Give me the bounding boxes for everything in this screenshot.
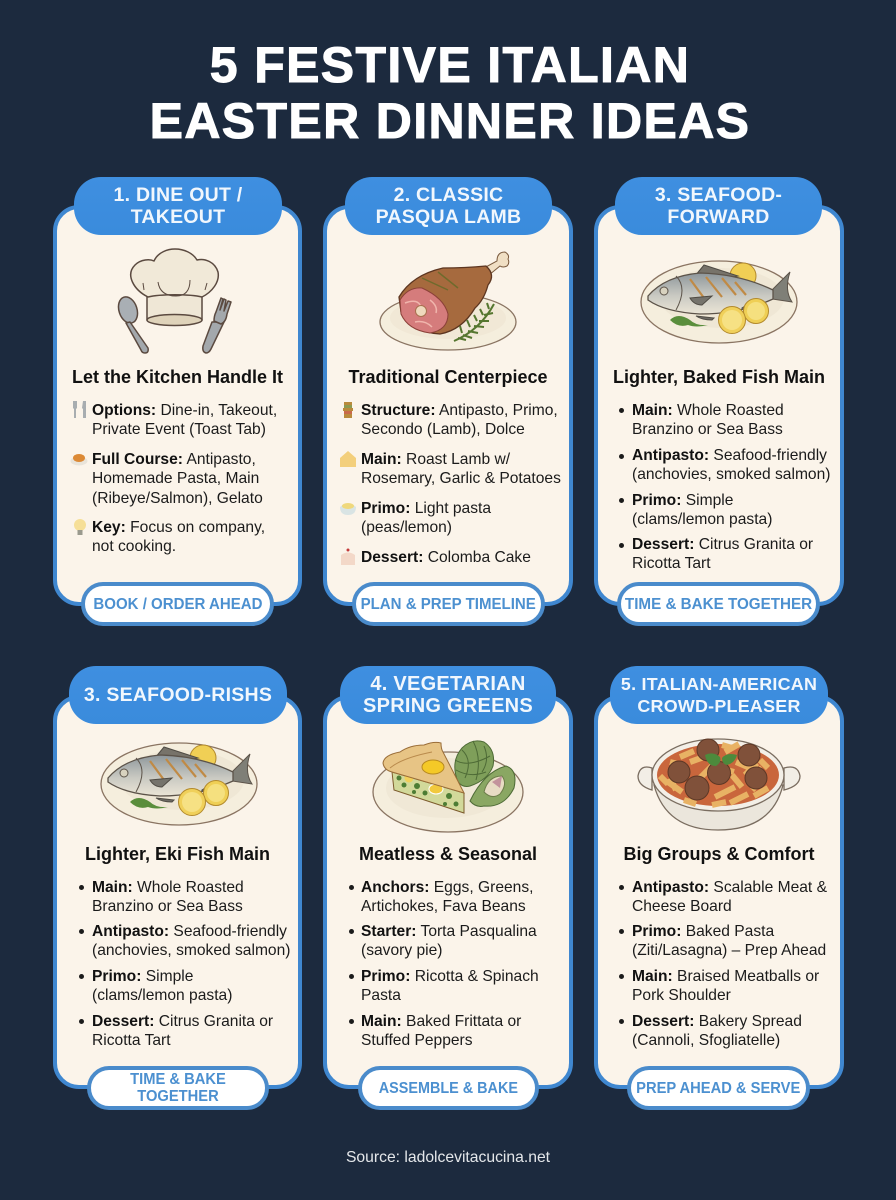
button: plan and prep: [352, 582, 545, 626]
button: assemble and bake: ASSEMBLE & BAKE: [379, 1080, 518, 1096]
button: prep ahead and serve: [627, 1066, 810, 1110]
list: seafood-rishs items: Primo: Simple: [92, 968, 193, 985]
text: full course: (Ribeye/Salmon), Gelato: [92, 490, 263, 507]
text: structure: [361, 402, 558, 438]
list: vegetarian items: Stuffed Peppers: [361, 1032, 473, 1049]
icon: torta pasqualina and artichokes: [372, 740, 524, 833]
list: seafood-forward items: Branzino or Sea Bass: [632, 421, 783, 438]
list: vegetarian items: Primo: Ricotta & Spinach: [361, 968, 539, 985]
list: vegetarian items: Main: Baked Frittata or: [361, 1013, 521, 1030]
header: dine out: 1. DINE OUT /: [114, 184, 242, 206]
text: structure: Structure: Antipasto, Primo,: [361, 402, 558, 419]
text: main lamb: Rosemary, Garlic & Potatoes: [361, 470, 561, 487]
heading: lighter fish main garbled: Lighter, Eki Fish Main: [85, 844, 270, 864]
list: seafood-rishs items: Ricotta Tart: [92, 1032, 171, 1049]
header: seafood-rishs: [69, 666, 287, 724]
icon: baked ziti dish: [637, 738, 801, 831]
title: 5 FESTIVE ITALIAN: [210, 37, 690, 93]
list: vegetarian items: (savory pie): [361, 942, 442, 959]
list: seafood-forward items: Ricotta Tart: [632, 555, 711, 572]
header: italian-american: 5. ITALIAN-AMERICAN: [621, 674, 817, 694]
text: full course: [92, 451, 263, 507]
icon: baked fish on plate second: [100, 742, 258, 826]
list: seafood-forward items: Dessert: Citrus Granita or: [632, 536, 813, 553]
icon: cheese: [340, 451, 356, 467]
panel: 2 classic lamb: [323, 177, 573, 606]
list: vegetarian items: Artichokes, Fava Beans: [361, 898, 526, 915]
text: key: not cooking.: [92, 538, 176, 555]
button: time and bake: [617, 582, 820, 626]
text: structure: Secondo (Lamb), Dolce: [361, 421, 525, 438]
list: italian-american items: (Ziti/Lasagna) – Prep Ahead: [632, 942, 826, 959]
text: dessert colomba: Dessert: Colomba Cake: [361, 549, 531, 566]
list: seafood-forward items: [619, 402, 830, 572]
header: classic lamb: [345, 177, 552, 235]
heading: lighter baked fish main: Lighter, Baked Fish Main: [613, 367, 825, 387]
button: prep ahead and serve: PREP AHEAD & SERVE: [636, 1080, 801, 1096]
header: italian-american: CROWD-PLEASER: [637, 696, 801, 716]
icon: cake: [341, 548, 355, 565]
list: vegetarian items: Pasta: [361, 987, 401, 1004]
list: seafood-forward items: Main: Whole Roasted: [632, 402, 784, 419]
button: book order ahead: BOOK / ORDER AHEAD: [93, 596, 262, 612]
list: vegetarian items: Anchors: Eggs, Greens,: [361, 879, 533, 896]
list: italian-american items: Pork Shoulder: [632, 987, 731, 1004]
icon: utensils: [73, 401, 86, 418]
list: seafood-forward items: (clams/lemon pasta): [632, 511, 772, 528]
header: seafood-forward: FORWARD: [667, 206, 770, 228]
panel: 3 seafood-forward: [594, 177, 844, 606]
header: dine out: TAKEOUT: [131, 206, 225, 228]
text: primo light pasta: [361, 500, 492, 536]
button: book order ahead: [81, 582, 274, 626]
list: seafood-rishs items: Main: Whole Roasted: [92, 879, 244, 896]
header: vegetarian: 4. VEGETARIAN: [370, 672, 526, 694]
header: classic lamb: PASQUA LAMB: [376, 206, 521, 228]
heading: traditional centerpiece: Traditional Centerpiece: [348, 367, 548, 387]
text: primo light pasta: Primo: Light pasta: [361, 500, 491, 517]
list: seafood-rishs items: (clams/lemon pasta): [92, 987, 232, 1004]
list: seafood-rishs items: [79, 879, 290, 1049]
icon: light bulb: [74, 519, 86, 535]
panel: 5 italian-american: [594, 666, 844, 1089]
text: main lamb: [361, 451, 561, 487]
text: full course: Full Course: Antipasto,: [92, 451, 256, 468]
heading: big groups: Big Groups & Comfort: [624, 844, 814, 864]
list: seafood-rishs items: Antipasto: Seafood-friendly: [92, 923, 287, 940]
icon: pasta bowl: [340, 503, 356, 515]
list: italian-american items: Antipasto: Scalable Meat &: [632, 879, 827, 896]
list: vegetarian items: Starter: Torta Pasqualina: [361, 923, 537, 940]
header: vegetarian: SPRING GREENS: [363, 695, 533, 717]
list: seafood-forward items: Antipasto: Seafood-friendly: [632, 447, 827, 464]
icon: baked fish on plate: [640, 260, 798, 344]
list: seafood-rishs items: Branzino or Sea Bass: [92, 898, 243, 915]
source: Source: ladolcevitacucina.net: [346, 1149, 550, 1166]
icon: layered stack: [343, 402, 353, 418]
button: assemble and bake: [358, 1066, 539, 1110]
list: seafood-forward items: (anchovies, smoked salmon): [632, 466, 830, 483]
header: italian-american: [610, 666, 828, 724]
list: seafood-forward items: Primo: Simple: [632, 492, 733, 509]
list: italian-american items: Cheese Board: [632, 898, 732, 915]
text: key: [92, 519, 265, 555]
text: options: [92, 402, 277, 438]
button: time and bake: TIME & BAKE TOGETHER: [625, 596, 812, 612]
list: italian-american items: Primo: Baked Pasta: [632, 923, 774, 940]
panel: 4 vegetarian: [323, 666, 573, 1089]
header: seafood-rishs: 3. SEAFOOD-RISHS: [84, 684, 272, 706]
text: key: Key: Focus on company,: [92, 519, 265, 536]
list: seafood-rishs items: (anchovies, smoked salmon): [92, 942, 290, 959]
button: time and bake together: [87, 1066, 269, 1110]
list: vegetarian items: [349, 879, 539, 1049]
list: italian-american items: (Cannoli, Sfogliatelle): [632, 1032, 780, 1049]
text: full course: Homemade Pasta, Main: [92, 470, 259, 487]
button: plan and prep: PLAN & PREP TIMELINE: [361, 596, 536, 612]
panel: 1 dine out: [53, 177, 302, 606]
icon: pasta plate: [70, 454, 88, 466]
text: options: Private Event (Toast Tab): [92, 421, 266, 438]
list: italian-american items: Dessert: Bakery Spread: [632, 1013, 802, 1030]
text: options: Options: Dine-in, Takeout,: [92, 402, 277, 419]
list: italian-american items: [619, 879, 827, 1049]
list: seafood-rishs items: Dessert: Citrus Granita or: [92, 1013, 273, 1030]
title: EASTER DINNER IDEAS: [150, 93, 750, 149]
text: primo light pasta: (peas/lemon): [361, 519, 452, 536]
header: seafood-forward: [615, 177, 822, 235]
heading: let the kitchen: Let the Kitchen Handle It: [72, 367, 283, 387]
title: [150, 37, 750, 149]
heading: meatless and seasonal: Meatless & Seasonal: [359, 844, 537, 864]
text: main lamb: Main: Roast Lamb w/: [361, 451, 510, 468]
icon: roast lamb on plate: [379, 252, 517, 351]
header: vegetarian: [340, 666, 556, 724]
button: time and bake together: TIME & BAKE: [130, 1071, 226, 1088]
button: time and bake together: TOGETHER: [137, 1088, 219, 1105]
list: italian-american items: Main: Braised Meatballs or: [632, 968, 819, 985]
header: classic lamb: 2. CLASSIC: [394, 184, 503, 206]
header: dine out: [74, 177, 282, 235]
panel: 3 seafood-rishs: [53, 666, 302, 1089]
header: seafood-forward: 3. SEAFOOD-: [655, 184, 782, 206]
icon: chef hat with spoon and fork: [118, 248, 232, 354]
